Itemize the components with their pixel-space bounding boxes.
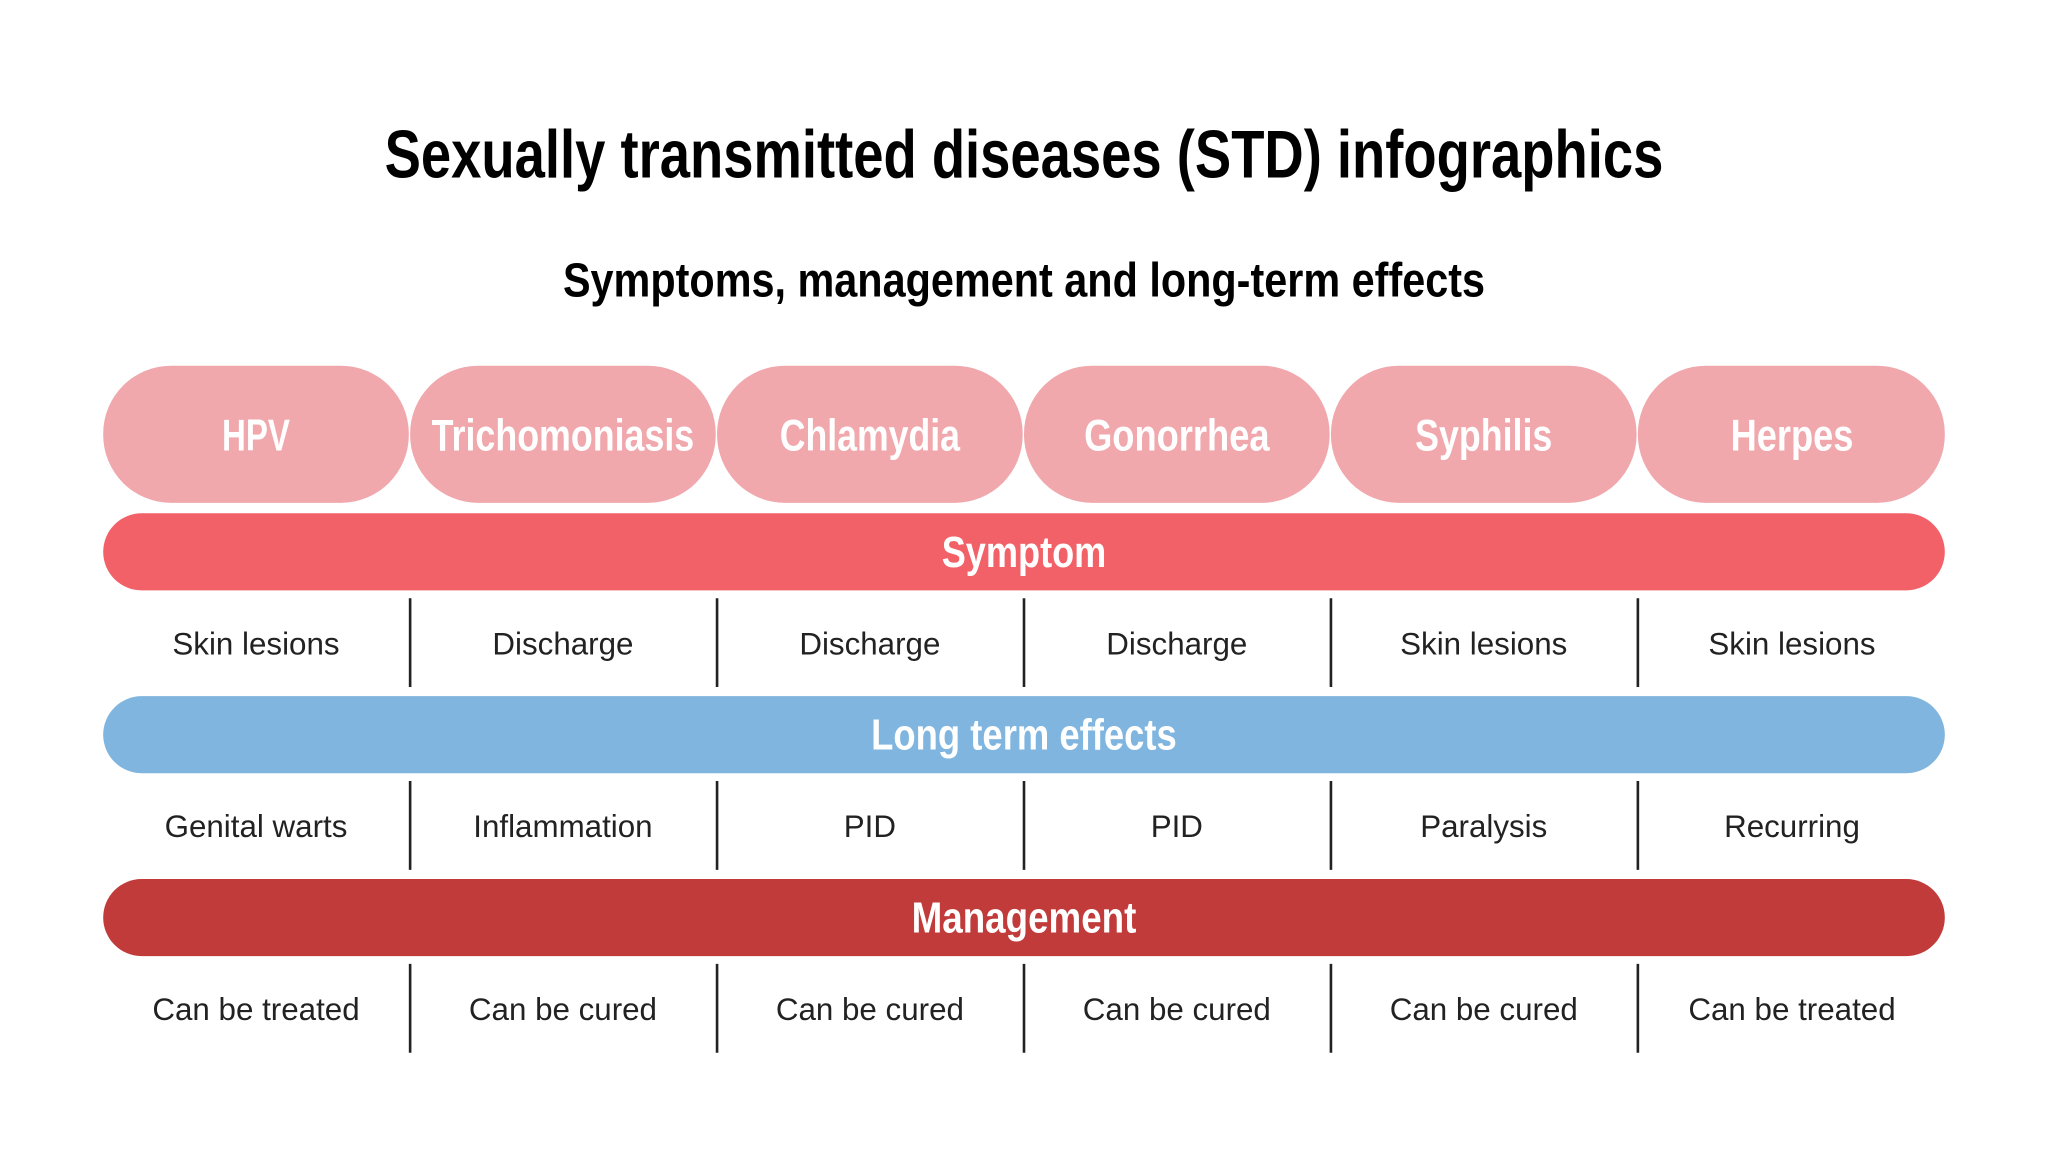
disease pills: Syphilis xyxy=(1415,412,1552,461)
row: symptoms: Skin lesions xyxy=(1708,626,1876,661)
disease pills: Chlamydia xyxy=(780,412,960,461)
row: management: Can be cured xyxy=(1390,992,1578,1027)
bar: symptom: Symptom xyxy=(942,529,1106,577)
row: long term effects xyxy=(165,781,1860,870)
bar: symptom xyxy=(103,513,1945,590)
bar: management xyxy=(103,879,1945,956)
row: symptoms: Discharge xyxy=(799,626,940,661)
row: management: Can be cured xyxy=(776,992,964,1027)
row: management: Can be cured xyxy=(469,992,657,1027)
row: long term effects: Recurring xyxy=(1724,809,1860,844)
row: management xyxy=(152,964,1896,1053)
disease pills: Trichomoniasis xyxy=(432,412,694,461)
row: long term effects: Genital warts xyxy=(165,809,347,844)
bar: long term effects: Long term effects xyxy=(871,712,1177,760)
disease pills xyxy=(103,366,1945,503)
row: symptoms xyxy=(172,598,1876,687)
row: long term effects: Paralysis xyxy=(1420,809,1547,844)
row: management: Can be treated xyxy=(1688,992,1896,1027)
row: management: Can be cured xyxy=(1083,992,1271,1027)
row: symptoms: Skin lesions xyxy=(172,626,340,661)
row: symptoms: Discharge xyxy=(492,626,633,661)
bar: long term effects xyxy=(103,696,1945,773)
title: Sexually transmitted diseases (STD) infographics xyxy=(385,118,1663,193)
bar: management: Management xyxy=(912,895,1136,943)
disease pills: Herpes xyxy=(1731,412,1853,461)
subtitle: Symptoms, management and long-term effects xyxy=(563,253,1485,307)
row: symptoms: Skin lesions xyxy=(1400,626,1567,661)
row: symptoms: Discharge xyxy=(1106,626,1247,661)
row: long term effects: Inflammation xyxy=(473,809,653,844)
row: long term effects: PID xyxy=(1151,809,1203,844)
disease pills: Gonorrhea xyxy=(1084,412,1270,461)
disease pills: HPV xyxy=(222,412,290,461)
row: long term effects: PID xyxy=(844,809,896,844)
row: management: Can be treated xyxy=(152,992,360,1027)
